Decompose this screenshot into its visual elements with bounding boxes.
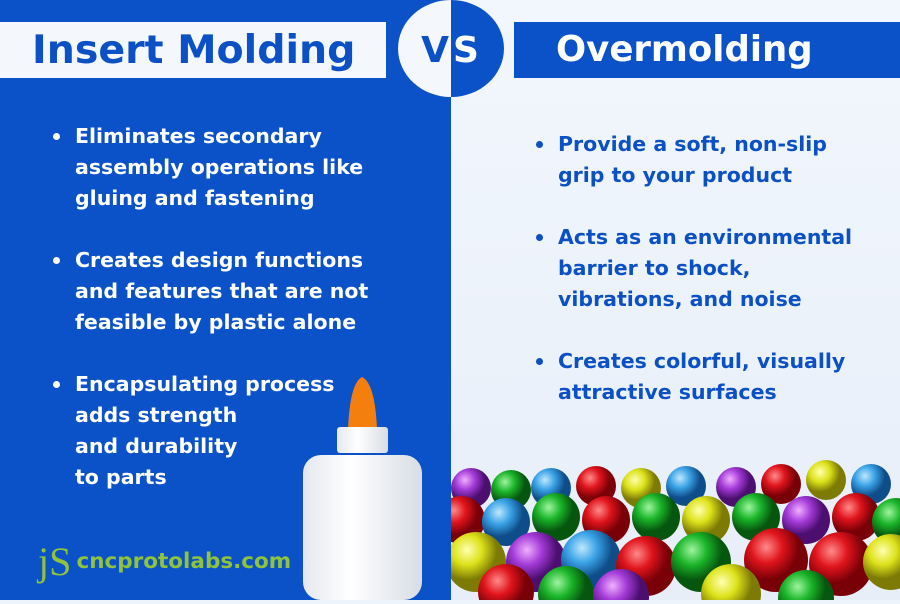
heading: Insert Molding <box>0 22 386 78</box>
bullet 1 <box>536 132 827 187</box>
bullet 2 <box>536 225 852 311</box>
bullet 3: and durability <box>75 434 237 458</box>
bullet 2: barrier to shock, <box>558 256 750 280</box>
heading: Overmolding: Overmolding <box>556 29 813 70</box>
bullet 2: vibrations, and noise <box>558 287 802 311</box>
heading: Insert Molding: Insert Molding <box>32 27 355 73</box>
bullet 3: Creates colorful, visually <box>558 349 845 373</box>
bullet 3 <box>53 372 334 489</box>
bullet 3: attractive surfaces <box>558 380 777 404</box>
bullet 2: Creates design functions <box>75 248 363 272</box>
VS circle <box>398 0 504 97</box>
bullet 1: gluing and fastening <box>75 186 315 210</box>
bullet 2: feasible by plastic alone <box>75 310 356 334</box>
bullet 1: Eliminates secondary <box>75 124 322 148</box>
bullet 2 <box>53 248 368 334</box>
panel: left blue <box>0 0 451 600</box>
VS circle: V <box>421 30 449 71</box>
bullet 3: Encapsulating process <box>75 372 334 396</box>
image: colorful balls <box>451 460 900 600</box>
bullet 3: adds strength <box>75 403 237 427</box>
heading: Overmolding <box>514 22 900 78</box>
bullet 2: and features that are not <box>75 279 368 303</box>
logo: cncprotolabs.com: jS cncprotolabs.com <box>38 539 291 584</box>
bullet 1 <box>53 124 363 210</box>
bullet 1: Provide a soft, non-slip <box>558 132 827 156</box>
icon: glue bottle <box>303 377 422 600</box>
bullet 3 <box>536 349 845 404</box>
bullet 1: assembly operations like <box>75 155 363 179</box>
bullet 3: to parts <box>75 465 167 489</box>
left bullets <box>53 124 368 489</box>
bullet 1: grip to your product <box>558 163 792 187</box>
bullet 2: Acts as an environmental <box>558 225 852 249</box>
VS circle: S <box>453 30 479 71</box>
panel: right light <box>451 0 900 600</box>
right bullets <box>536 132 852 404</box>
